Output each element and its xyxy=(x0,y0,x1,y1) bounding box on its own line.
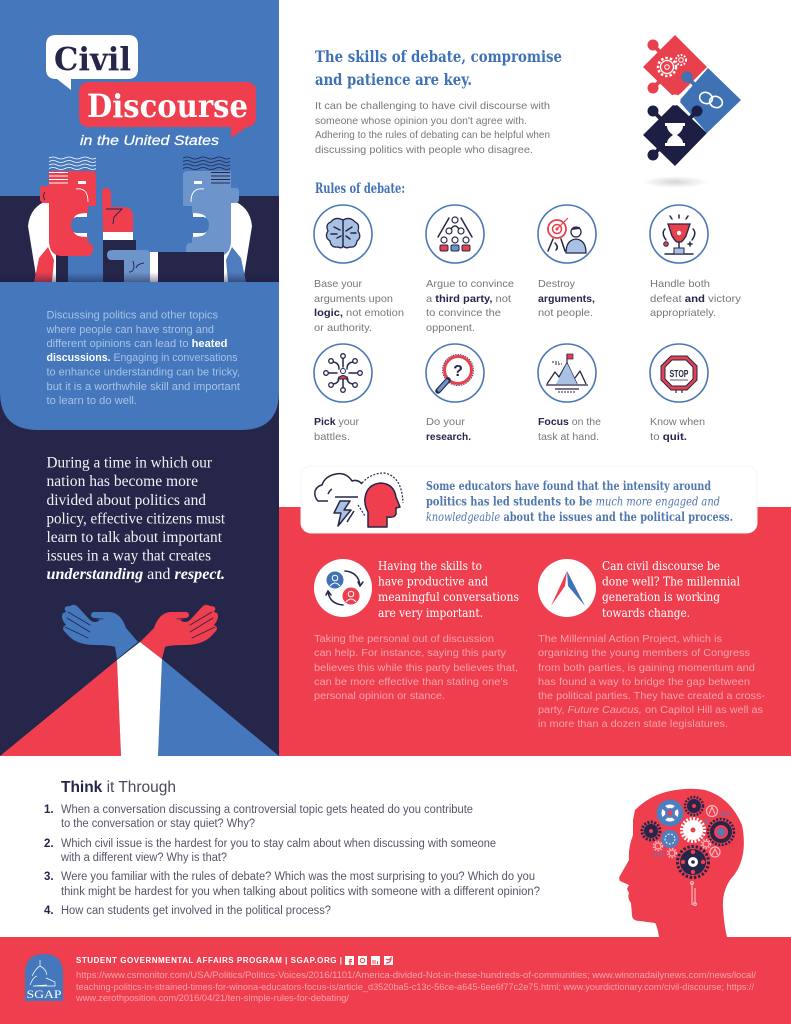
panel: millennial generation: generation is working xyxy=(602,590,720,604)
text block: skills paragraph: someone whose opinion you don't agree with. xyxy=(315,115,527,127)
panel: productive conversations: Having the skills to xyxy=(378,559,482,573)
rule 5: pick your battles: battles. xyxy=(314,431,350,443)
rule 4: defeat and victory: appropriately. xyxy=(650,307,716,319)
illustration: two people arguing xyxy=(0,157,279,282)
icon: millennial action project logo xyxy=(538,559,596,617)
text block: introduction: to learn to do well. xyxy=(46,395,137,407)
panel: millennial generation xyxy=(538,559,766,730)
rule 8: know when to quit: Know when xyxy=(650,416,705,428)
heading: rules of debate: Rules of debate: xyxy=(315,181,405,197)
gears xyxy=(642,797,734,906)
icon: brain xyxy=(314,205,372,263)
list: discussion questions: with a different view? Why is that? xyxy=(60,852,227,864)
icon: puzzle pieces xyxy=(642,35,741,188)
panel: productive conversations: are very important. xyxy=(378,606,483,620)
rule 5: pick your battles xyxy=(314,344,372,443)
source links: teaching-politics-in-strained-times-for-winona-educators-focus-is/article_d3520ba5-c13c-56ce-a645-6ee6f77c2e75.html; www.yourdictionary.com/civil-discourse; https:// xyxy=(76,982,755,992)
logo: SGAP badge: SGAP xyxy=(26,987,62,1001)
panel: millennial generation: Can civil discourse be xyxy=(602,559,720,573)
text block: introduction: where people can have strong and xyxy=(46,324,214,336)
heading: skills: and patience are key. xyxy=(315,70,472,89)
panel: red section background xyxy=(279,507,791,756)
callout: educators xyxy=(301,466,757,533)
speech bubble: Discourse: Discourse xyxy=(87,87,248,125)
list: discussion questions: to the conversation or stay quiet? Why? xyxy=(61,818,255,830)
text block: introduction: but it is a worthwhile skill and important xyxy=(46,381,240,393)
list: discussion questions: 4. xyxy=(44,905,54,917)
rule 7: focus: task at hand. xyxy=(538,431,599,443)
rule 2: third party: Argue to convince xyxy=(426,278,514,290)
speech bubble: Civil xyxy=(46,35,138,90)
rule 2: third party: opponent. xyxy=(426,322,475,334)
text block: introduction: Discussing politics and other topics xyxy=(46,310,218,322)
rule 6: do your research xyxy=(426,344,484,443)
rule 8: know when to quit: to quit. xyxy=(650,431,687,443)
person: blue xyxy=(183,157,252,282)
rule 1: logic: Base your xyxy=(314,278,363,290)
list: discussion questions: How can students get involved in the political process? xyxy=(61,905,331,917)
icon: blue hand xyxy=(62,605,138,659)
text block: effective citizens: understanding and respect. xyxy=(46,566,225,583)
source links: www.zerothposition.com/2016/04/21/ten-simple-rules-for-debating/ xyxy=(75,993,350,1003)
rule 2: third party: a third party, not xyxy=(426,293,511,305)
heading: skills xyxy=(315,47,562,89)
rule 5: pick your battles: Pick your xyxy=(314,416,360,428)
text block: effective citizens: learn to talk about important xyxy=(46,529,223,546)
callout: educators: Some educators have found that the intensity around xyxy=(426,479,711,493)
person: red xyxy=(28,157,96,282)
panel: productive conversations xyxy=(314,559,519,702)
rule 7: focus: Focus on the xyxy=(538,416,601,428)
rule 3: destroy arguments: Destroy xyxy=(538,278,576,290)
speech bubble: Civil: Civil xyxy=(54,40,131,78)
title xyxy=(46,35,256,148)
icons: social media xyxy=(345,956,393,965)
footer heading: STUDENT GOVERNMENTAL AFFAIRS PROGRAM | SGAP.ORG | xyxy=(76,956,342,965)
icon: cloud, lightning and head xyxy=(315,473,403,527)
list: discussion questions: 2. xyxy=(44,838,54,850)
panel: millennial generation: has found a way to bridge the gap between xyxy=(538,676,750,688)
speech bubble: Discourse xyxy=(79,82,256,138)
panel: millennial generation: party, Future Caucus, on Capitol Hill as well as xyxy=(538,704,763,716)
list: discussion questions: 3. xyxy=(44,871,54,883)
panel: millennial generation: from both parties, is gaining momentum and xyxy=(538,662,755,674)
list: discussion questions: Were you familiar with the rules of debate? Which was the most surprising to you? Which do you xyxy=(61,871,535,883)
source links: https://www.csmonitor.com/USA/Politics/Politics-Voices/2016/1101/America-divided-Not-in-these-hundreds-of-communities; www.winonadailynews.com/news/local/ xyxy=(76,970,757,980)
rule 7: focus xyxy=(538,344,601,443)
panel: productive conversations: have productive and xyxy=(378,574,488,588)
icon: stop sign: STOP xyxy=(670,368,688,380)
rule 3: destroy arguments: arguments, xyxy=(538,293,595,305)
rule 2: third party xyxy=(426,205,514,334)
icon: people exchanging xyxy=(314,559,372,617)
icon: target and person xyxy=(538,205,596,263)
panel: productive conversations: personal opinion or stance. xyxy=(314,690,445,702)
icon: audience xyxy=(426,205,484,263)
list: discussion questions: Which civil issue is the hardest for you to stay calm about when discussing with someone xyxy=(61,838,496,850)
icon: network xyxy=(314,344,372,402)
list: discussion questions: think might be hardest for you when talking about politics with someone with a different opinion? xyxy=(61,886,540,898)
icon: trophy xyxy=(650,205,708,263)
text block: introduction: different opinions can lead to heated xyxy=(46,338,228,350)
illustration: open hands over triangles xyxy=(0,605,279,756)
source links xyxy=(75,970,757,1003)
panel: footer xyxy=(0,937,791,1024)
rule 4: defeat and victory: Handle both xyxy=(650,278,710,290)
list: discussion questions: When a conversation discussing a controversial topic gets heated do you contribute xyxy=(61,804,473,816)
rule 6: do your research: research. xyxy=(426,431,471,443)
panel: millennial generation: towards change. xyxy=(602,606,690,620)
logo: SGAP badge xyxy=(25,954,63,1001)
panel: productive conversations: believes this while this party believes that, xyxy=(314,662,518,674)
rule 4: defeat and victory: defeat and victory xyxy=(650,293,742,305)
text block: effective citizens: policy, effective citizens must xyxy=(46,510,226,528)
heading: think it through: Think it Through xyxy=(61,779,176,796)
panel: millennial generation: done well? The millennial xyxy=(602,574,740,588)
puzzle piece: blue chain xyxy=(679,68,741,133)
icon: red hand xyxy=(140,605,218,659)
icon: magnifying glass: ? xyxy=(453,363,463,380)
panel: productive conversations: can be more effective than stating one's xyxy=(314,676,508,688)
text block: skills paragraph xyxy=(315,100,550,156)
text block: skills paragraph: Adhering to the rules of debating can be helpful when xyxy=(315,129,550,141)
rule 8: know when to quit xyxy=(650,344,708,443)
rule 4: defeat and victory xyxy=(650,205,742,319)
panel: millennial generation: in more than a dozen state legislatures. xyxy=(538,718,728,730)
panel: millennial generation: The Millennial Action Project, which is xyxy=(538,633,722,645)
rule 1: logic xyxy=(314,205,404,334)
list: discussion questions xyxy=(44,804,540,917)
text block: introduction xyxy=(46,310,240,407)
icon: thumbs up hand xyxy=(102,188,136,282)
panel: millennial generation: the political parties. They have created a cross- xyxy=(538,690,766,702)
rule 6: do your research: Do your xyxy=(426,416,466,428)
panel: productive conversations: Taking the personal out of discussion xyxy=(314,633,494,645)
panel: left column background xyxy=(0,0,279,756)
callout: educators: politics has led students to be much more engaged and xyxy=(426,494,720,508)
panel: productive conversations: meaningful conversations xyxy=(378,590,519,604)
text block: skills paragraph: It can be challenging to have civil discourse with xyxy=(315,100,550,112)
text block: effective citizens: nation has become more xyxy=(46,473,198,490)
rule 1: logic: or authority. xyxy=(314,322,372,334)
text block: introduction: discussions. Engaging in conversations xyxy=(46,352,238,364)
panel: millennial generation: organizing the young members of Congress xyxy=(538,647,750,659)
text block: effective citizens xyxy=(46,454,226,583)
rule 2: third party: to convince the xyxy=(426,307,501,319)
rule 1: logic: logic, not emotion xyxy=(314,307,404,319)
panel: productive conversations: can help. For instance, saying this party xyxy=(314,647,507,659)
rule 3: destroy arguments: not people. xyxy=(538,307,593,319)
callout: educators: knowledgeable about the issues and the political process. xyxy=(426,510,733,524)
icon: pointing hand xyxy=(107,250,224,282)
puzzle piece: red gears xyxy=(643,35,707,98)
subtitle: in the United States xyxy=(80,133,219,148)
text block: effective citizens: issues in a way that creates xyxy=(46,548,211,564)
text block: effective citizens: During a time in which our xyxy=(46,454,213,472)
text block: skills paragraph: discussing politics with people who disagree. xyxy=(315,144,533,156)
text block: effective citizens: divided about politics and xyxy=(46,492,206,509)
illustration: head with gears xyxy=(619,789,744,937)
text block: introduction: to enhance understanding can be tricky, xyxy=(46,366,240,378)
rule 3: destroy arguments xyxy=(538,205,596,319)
list: discussion questions: 1. xyxy=(44,804,54,816)
heading: skills: The skills of debate, compromise xyxy=(315,47,562,66)
rule 1: logic: arguments upon xyxy=(314,293,393,305)
icon: mountain with flag xyxy=(538,344,596,402)
puzzle piece: navy hourglass xyxy=(643,94,707,166)
